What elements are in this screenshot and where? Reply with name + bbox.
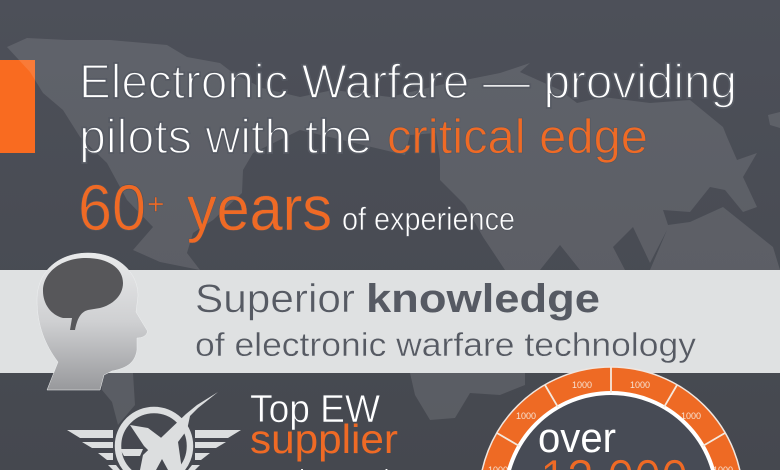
band text — [195, 277, 697, 363]
supplier text: Top EW — [250, 388, 380, 431]
gauge text: over — [538, 414, 616, 461]
knowledge band — [0, 270, 780, 373]
title — [79, 56, 737, 164]
gauge: 12 segment ring: 1000 — [516, 411, 536, 421]
experience line: years — [187, 174, 332, 244]
gauge: 12 segment ring — [479, 367, 743, 470]
icon: jet wings badge — [67, 392, 241, 470]
experience line — [78, 171, 515, 244]
band text: of electronic warfare technology — [195, 326, 697, 363]
experience line: 60 — [78, 171, 146, 244]
experience line: + — [147, 188, 165, 221]
icon: head with brain — [37, 253, 148, 390]
accent bar — [0, 60, 35, 153]
gauge: 12 segment ring: 1000 — [681, 411, 701, 421]
gauge: 12 segment ring: 1000 — [572, 380, 592, 390]
title: pilots with the — [79, 111, 372, 164]
title: Electronic Warfare — providing — [79, 56, 737, 109]
experience line: of experience — [342, 201, 515, 237]
band text: Superior — [195, 277, 355, 321]
supplier text: supplier — [250, 416, 398, 462]
band text: knowledge — [366, 277, 600, 321]
gauge: 12 segment ring: 1000 — [630, 380, 650, 390]
supplier text — [250, 388, 452, 470]
gauge text — [538, 414, 688, 470]
title: critical edge — [387, 111, 648, 164]
